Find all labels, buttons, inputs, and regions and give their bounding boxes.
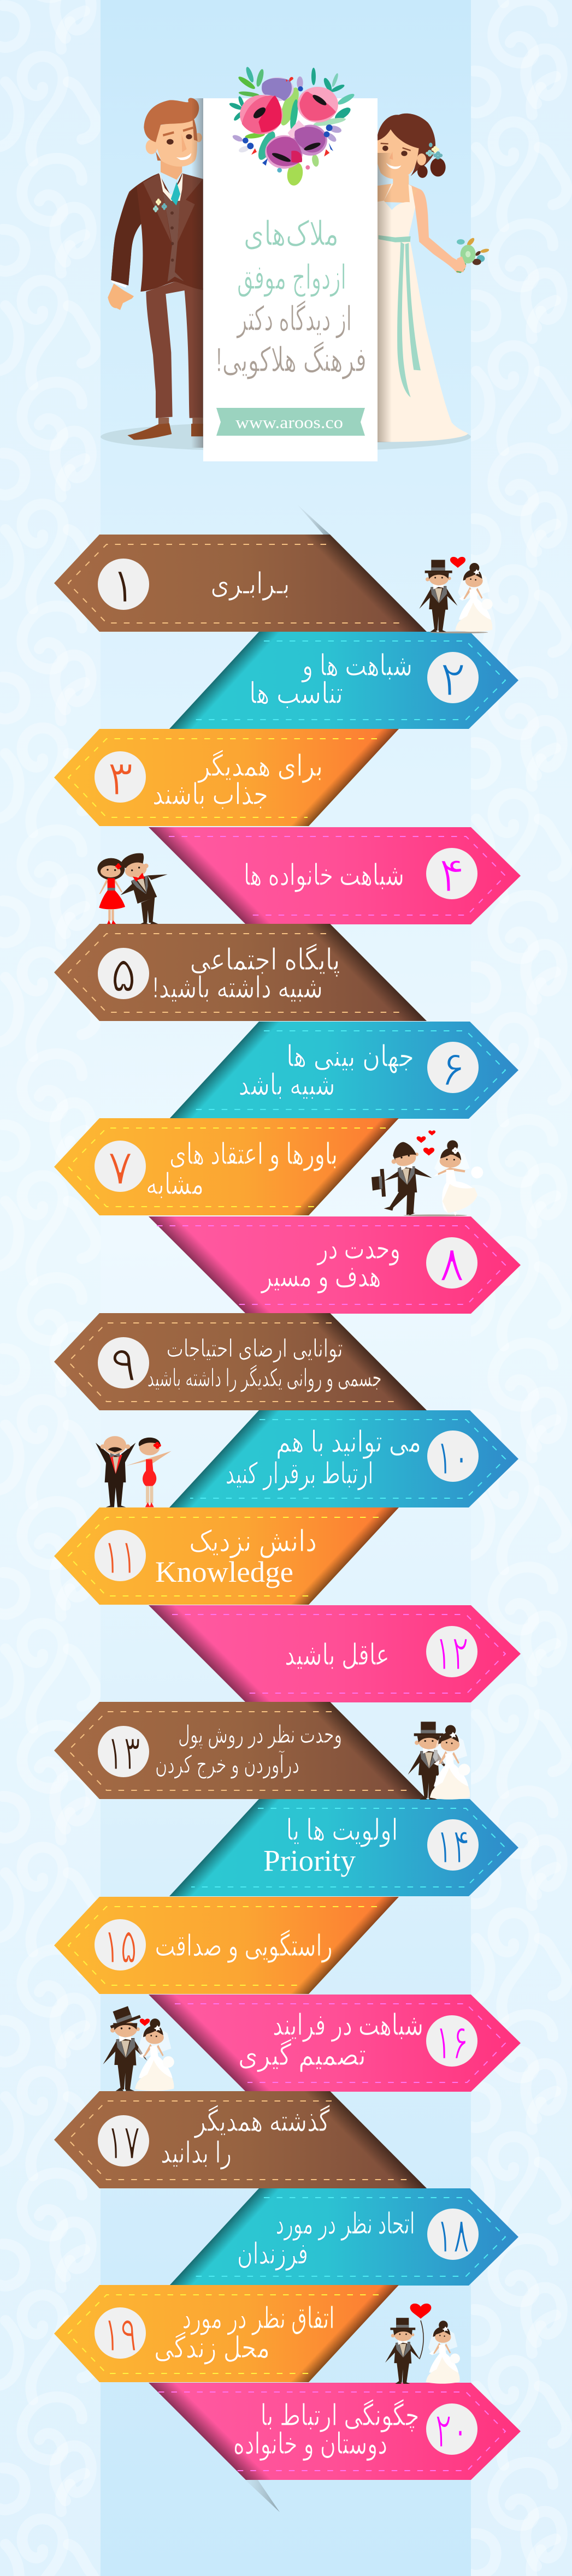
couple: embracing groom and bride <box>408 1722 470 1800</box>
ribbon 8 <box>149 1216 521 1314</box>
ribbon 12 <box>149 1605 521 1702</box>
ribbon 8: ۸ <box>439 1237 465 1292</box>
ribbon 8: هدف و مسیر <box>260 1260 381 1293</box>
couple: groom holding hat with dancing bride <box>371 1130 483 1216</box>
ribbon 6: شبیه باشد <box>238 1069 335 1101</box>
ribbon 7: ۷ <box>107 1141 133 1195</box>
ribbon 14: ۱۴ <box>436 1819 470 1874</box>
website banner <box>216 408 365 436</box>
ribbon 7: باورها و اعتقاد های <box>169 1138 338 1171</box>
couple: balloon heart <box>385 2304 460 2384</box>
ribbon 16: تصمیم گیری <box>238 2038 366 2072</box>
title text: ملاک‌های <box>244 215 339 253</box>
ribbon 11: Knowledge <box>155 1556 293 1588</box>
ribbon 9: جسمی و روانی یکدیگر را داشته باشید <box>148 1364 381 1393</box>
couple: mustached man and woman in red <box>96 1436 172 1507</box>
card edge shadows <box>191 98 392 448</box>
ribbon 5: شبیه داشته باشید! <box>152 971 323 1004</box>
ribbon 3: ۳ <box>107 751 133 806</box>
bride <box>378 114 490 442</box>
ribbon 10 <box>169 1410 518 1507</box>
ribbon 5 <box>54 924 427 1021</box>
ribbon 13 <box>54 1702 427 1799</box>
ribbon 13: وحدت نظر در روش پول <box>178 1720 342 1749</box>
title text <box>216 215 367 379</box>
ribbon 7: مشابه <box>146 1168 204 1201</box>
ribbon 3: برای همدیگر <box>197 749 323 783</box>
ribbon 20: دوستان و خانواده <box>233 2427 387 2461</box>
title text: از دیدگاه دکتر <box>236 300 352 339</box>
ribbon 18: ۱۸ <box>436 2209 470 2263</box>
top fold tail <box>297 504 330 535</box>
ribbon 17: را بدانید <box>161 2136 232 2170</box>
ribbon 19: محل زندگی <box>154 2331 270 2365</box>
website banner: www.aroos.co <box>235 413 343 432</box>
ribbon 14: اولویت ها یا <box>286 1814 398 1847</box>
ribbon 16: شباهت در فرایند <box>273 2009 423 2042</box>
ribbon 19 <box>54 2285 399 2382</box>
ribbon 1 <box>54 535 427 632</box>
ribbon 11: دانش نزدیک <box>189 1525 317 1558</box>
ribbon 2 <box>169 632 518 729</box>
ribbon 12: عاقل باشید <box>285 1639 390 1671</box>
ribbon 19: اتفاق نظر در مورد <box>182 2302 334 2335</box>
title text: فرهنگ هلاکویی! <box>216 341 367 379</box>
ribbon 9: توانایی ارضای احتیاجات <box>166 1334 343 1363</box>
ribbon 5: ۵ <box>110 948 137 1002</box>
ribbon 14 <box>169 1799 518 1896</box>
ribbon 20 <box>149 2383 521 2480</box>
ribbon 6 <box>169 1022 518 1119</box>
ground shadow <box>101 422 471 452</box>
watercolor bouquet <box>228 66 356 187</box>
ribbon 13: درآوردن و خرج کردن <box>155 1749 299 1779</box>
ribbon 10: ارتباط برقرار کنید <box>225 1457 374 1491</box>
ribbon 18: اتحاد نظر در مورد <box>275 2207 415 2241</box>
ribbon 20: چگونگی ارتباط با <box>260 2399 420 2432</box>
ribbon 13: ۱۳ <box>107 1726 140 1780</box>
header illustration <box>101 66 490 461</box>
ribbon 2: تناسب ها <box>249 677 343 710</box>
ribbon 16: ۱۶ <box>435 2015 469 2070</box>
groom <box>108 98 203 440</box>
ribbon 9 <box>54 1313 427 1410</box>
ribbon 17: گذشته همدیگر <box>193 2104 330 2138</box>
ribbon 18 <box>169 2188 518 2286</box>
couple: kissing groom and bride <box>103 2003 174 2091</box>
ribbon 15: راستگویی و صداقت <box>155 1929 332 1963</box>
ribbon 17 <box>54 2091 427 2188</box>
ribbon 3: جذاب باشند <box>152 778 268 811</box>
ribbon 1: بـرابـری <box>211 567 290 601</box>
couple: heart above groom and bride <box>419 557 493 633</box>
ribbon 8: وحدت در <box>316 1232 400 1266</box>
ribbon 6: جهان بینی ها <box>286 1040 414 1073</box>
ribbon 17: ۱۷ <box>107 2115 140 2170</box>
ribbon 19: ۱۹ <box>103 2307 137 2362</box>
ribbon 4 <box>149 827 521 924</box>
white title card <box>203 98 378 461</box>
ribbon 20: ۲۰ <box>435 2403 469 2458</box>
ribbon 18: فرزندان <box>237 2237 308 2271</box>
ribbon 11 <box>54 1507 399 1605</box>
ribbon 6: ۶ <box>440 1042 466 1096</box>
ribbon 7 <box>54 1118 399 1215</box>
ribbon 2: ۲ <box>440 652 466 707</box>
bottom fold tail <box>245 2480 280 2512</box>
ribbon 5: پایگاه اجتماعی <box>190 943 340 977</box>
ribbon 14: Priority <box>263 1844 356 1877</box>
ribbon 4: ۴ <box>439 848 465 903</box>
couple: girl in red dress and pointing man <box>97 853 168 924</box>
ribbon 10: ۱۰ <box>436 1431 470 1485</box>
ribbon 4: شباهت خانواده ها <box>244 859 404 892</box>
ribbon 15 <box>54 1897 399 1994</box>
ribbon 2: شباهت ها و <box>301 649 412 682</box>
ribbon 3 <box>54 729 399 826</box>
ribbon 9: ۹ <box>110 1337 137 1392</box>
ribbon 11: ۱۱ <box>103 1530 137 1584</box>
ribbon 12: ۱۲ <box>435 1626 469 1681</box>
ribbon 15: ۱۵ <box>103 1919 137 1974</box>
ribbon 16 <box>149 1995 521 2092</box>
ribbon 10: می توانید با هم <box>276 1426 421 1459</box>
title text: ازدواج موفق <box>237 259 346 297</box>
ribbon 1: ۱ <box>110 559 137 613</box>
